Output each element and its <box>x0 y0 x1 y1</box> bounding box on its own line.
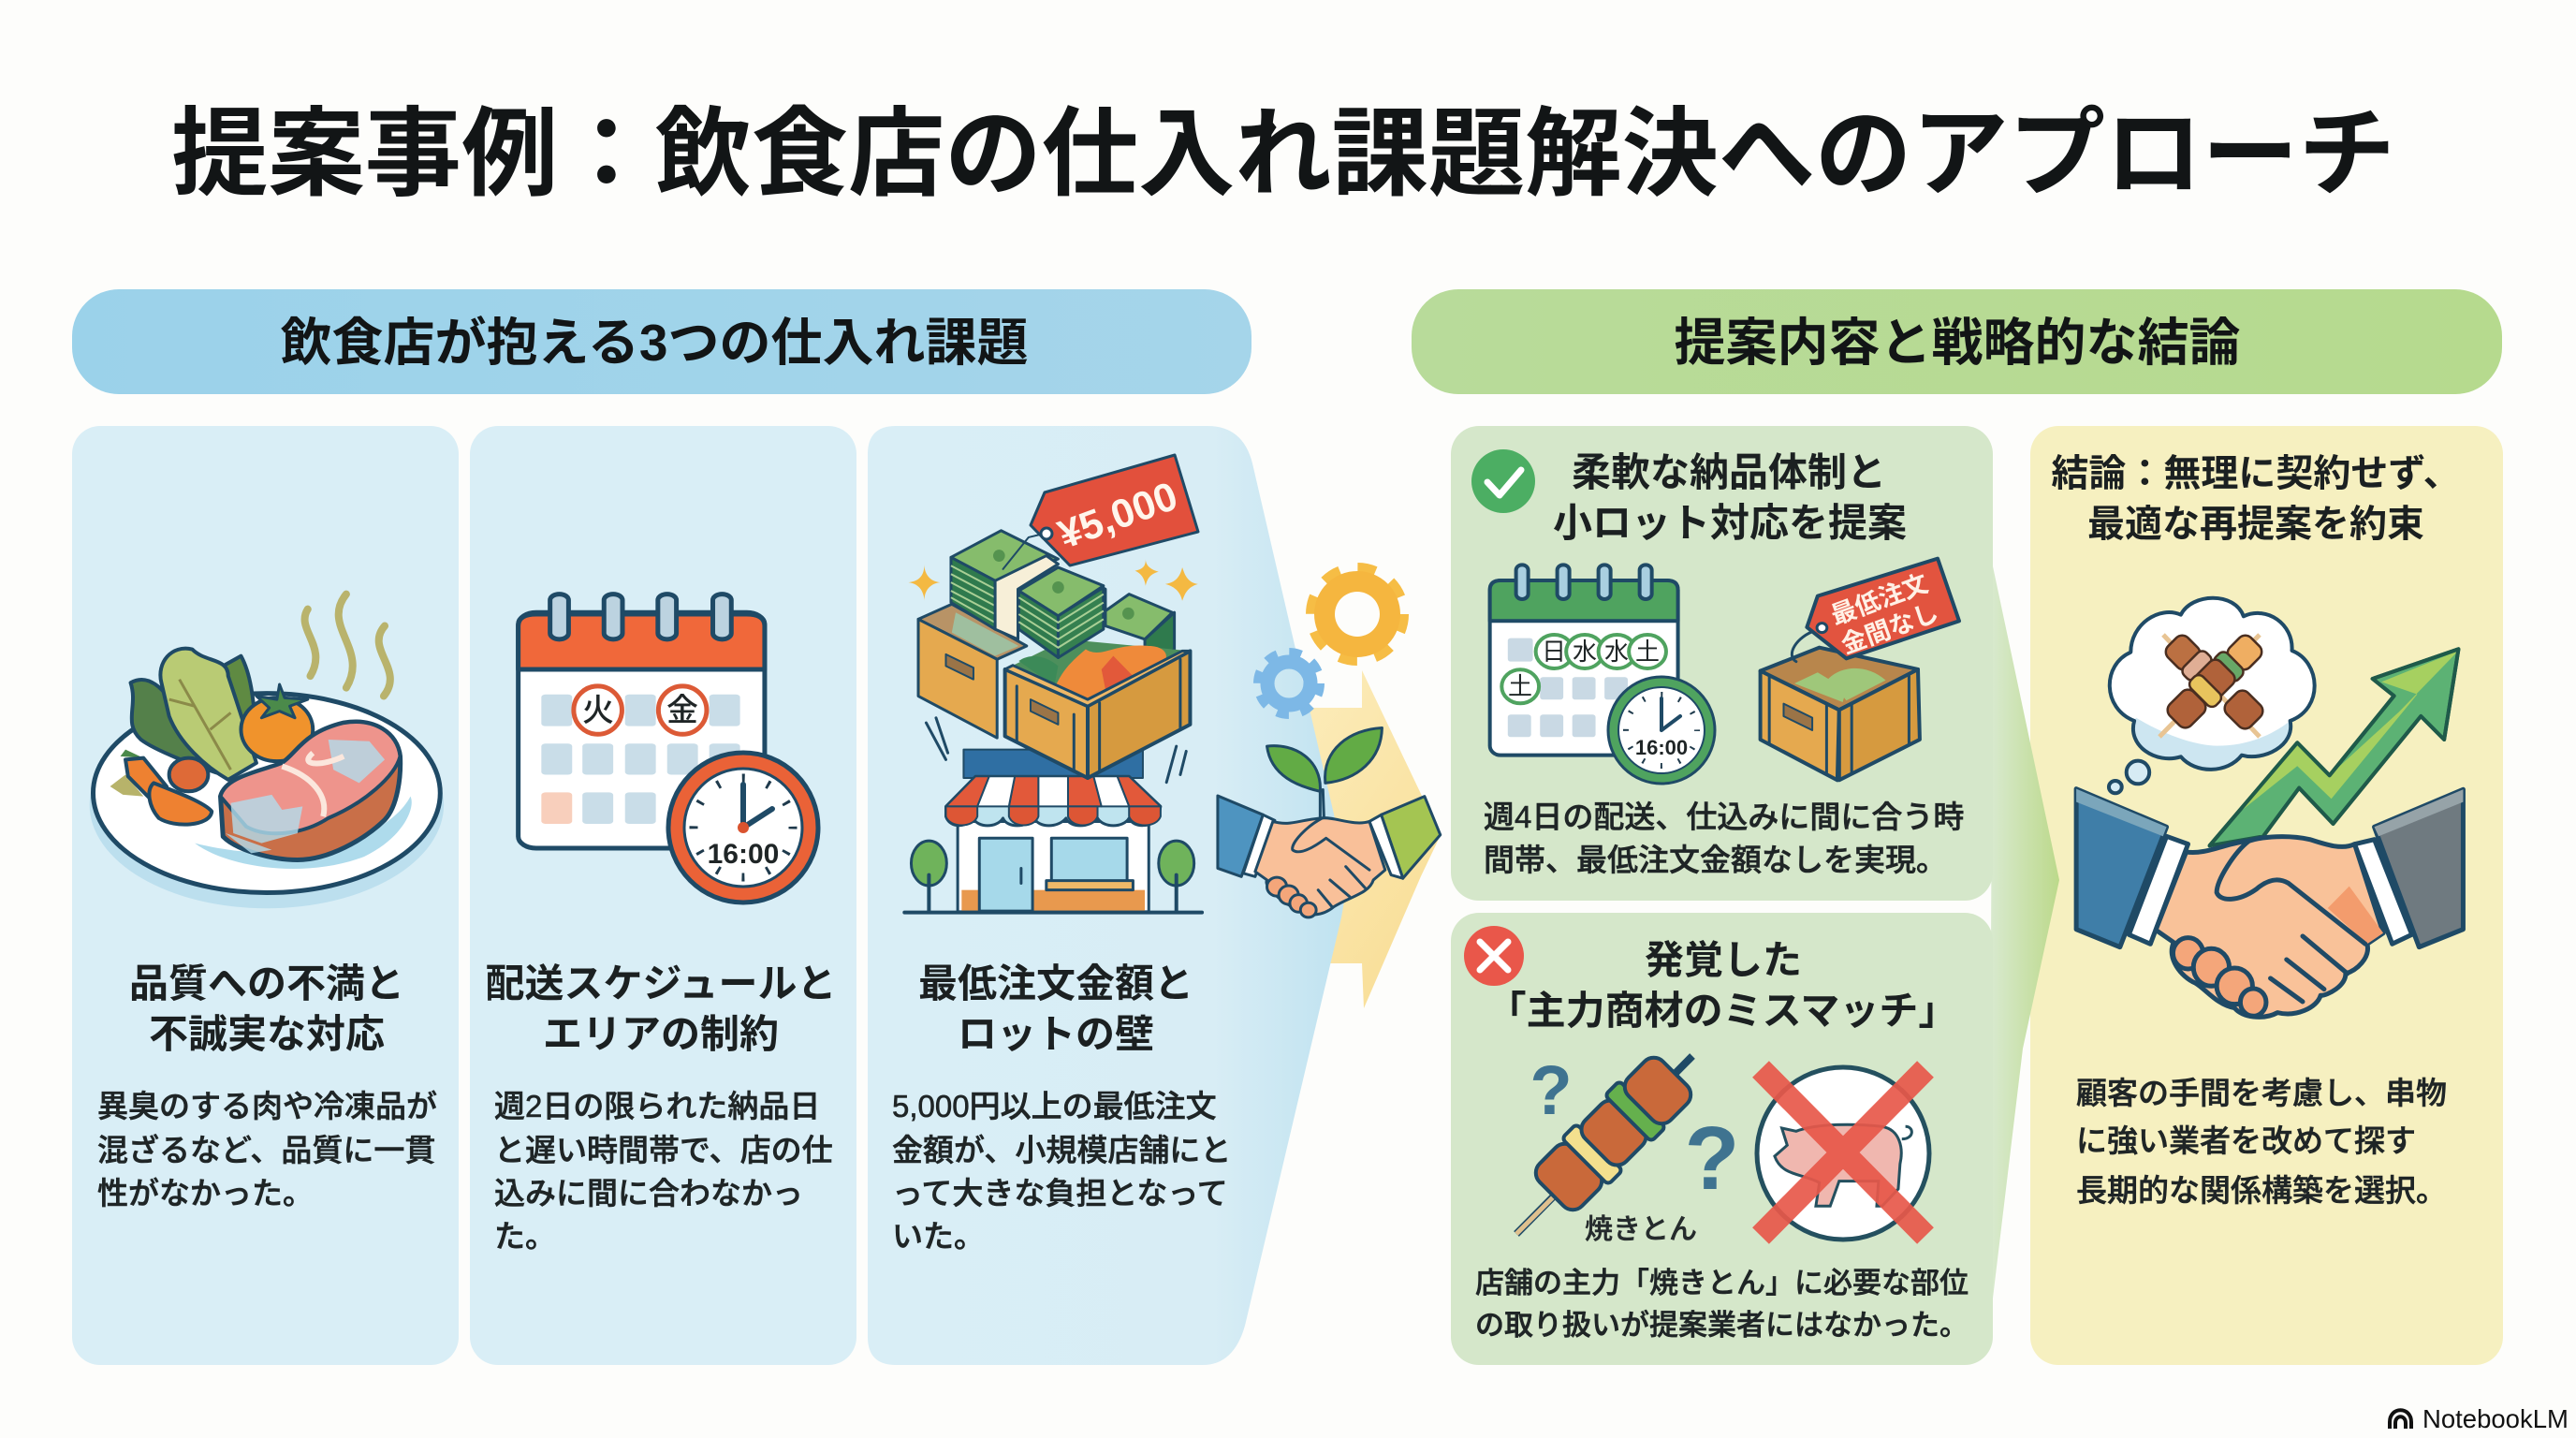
label: yakiton: 焼きとん <box>1585 1214 1697 1245</box>
icon: question marks: ? <box>1530 1051 1573 1129</box>
heading: 配送スケジュールと <box>485 961 837 1005</box>
icon: box with no minimum tag <box>1761 559 1959 780</box>
body text: 混ざるなど、品質に一貫 <box>97 1133 435 1167</box>
icon: crossed out pig <box>1757 1067 1929 1240</box>
body text: 長期的な関係構築を選択。 <box>2076 1173 2447 1208</box>
body text: 込みに間に合わなかっ <box>494 1176 803 1211</box>
body text: に強い業者を改めて探す <box>2076 1123 2416 1158</box>
section header: challenges <box>72 289 1251 394</box>
arrow: yellow transition behind challenges panel <box>1217 670 1441 1008</box>
panel: minimum order arrow panel <box>868 426 1348 1365</box>
heading: 結論：無理に契約せず、 <box>2051 453 2461 494</box>
icon: green calendar and clock: 16:00 <box>1635 736 1688 759</box>
icon: calendar and clock: 金 <box>666 693 698 728</box>
icon: green calendar and clock: 土 <box>1635 638 1660 666</box>
icon: gears <box>1259 570 1401 713</box>
icon: cross mark <box>1464 926 1524 986</box>
body text: た。 <box>494 1219 556 1254</box>
panel: conclusion <box>2030 426 2503 1365</box>
title: 提案事例：飲食店の仕入れ課題解決へのアプローチ <box>171 99 2395 208</box>
heading: ロットの壁 <box>958 1012 1154 1056</box>
body text: いた。 <box>892 1219 985 1254</box>
panel: proposal <box>1451 426 1993 901</box>
heading <box>1553 450 1907 545</box>
heading <box>1487 938 1957 1033</box>
heading: 「主力商材のミスマッチ」 <box>1487 989 1957 1033</box>
body text: 週2日の限られた納品日 <box>494 1089 820 1123</box>
heading: 柔軟な納品体制と <box>1572 450 1886 494</box>
icon: box with no minimum tag: 最低注文 <box>1827 569 1932 630</box>
heading: 最低注文金額と <box>918 961 1193 1005</box>
icon: green calendar and clock: 土 <box>1508 672 1532 700</box>
body text <box>494 1089 833 1254</box>
icon: rising arrow <box>2209 649 2458 845</box>
icon: thought cloud with crossed skewers <box>2109 598 2315 793</box>
icon: box with no minimum tag: 金間なし <box>1837 598 1942 659</box>
icon: plate of food <box>90 594 444 908</box>
heading <box>918 961 1193 1056</box>
body text: 間帯、最低注文金額なしを実現。 <box>1484 843 1947 877</box>
heading <box>129 961 404 1056</box>
icon: calendar and clock <box>519 594 818 902</box>
icon: price tag: ¥5,000 <box>1052 474 1183 558</box>
heading: 小ロット対応を提案 <box>1553 501 1907 545</box>
logo: NotebookLM: NotebookLM <box>2422 1404 2569 1433</box>
icon: big handshake <box>2076 789 2463 1017</box>
heading <box>485 961 837 1056</box>
heading: 品質への不満と <box>129 961 404 1005</box>
body text <box>1484 800 1964 877</box>
body text <box>1475 1267 1969 1342</box>
icon: price tag <box>1031 455 1198 565</box>
heading: 最適な再提案を約束 <box>2087 504 2424 545</box>
icon: check mark <box>1471 449 1535 513</box>
icon: yakiton skewer <box>1516 1052 1696 1234</box>
body text: 性がなかった。 <box>97 1176 314 1211</box>
body text: 週4日の配送、仕込みに間に合う時 <box>1484 800 1964 834</box>
arrow: green transition into conclusion <box>1989 566 2059 1329</box>
icon: calendar and clock: 火 <box>582 693 614 728</box>
body text <box>97 1089 437 1211</box>
body text: 店舗の主力「焼きとん」に必要な部位 <box>1475 1267 1969 1299</box>
body text: 顧客の手間を考慮し、串物 <box>2076 1076 2447 1110</box>
icon: question marks: ? <box>1685 1108 1739 1209</box>
icon: calendar and clock: 16:00 <box>708 839 779 870</box>
heading <box>2051 453 2461 545</box>
body text: 異臭のする肉や冷凍品が <box>97 1089 437 1123</box>
heading: エリアの制約 <box>543 1012 779 1056</box>
section header: proposal and conclusion <box>1412 289 2502 394</box>
icon: green calendar and clock: 水 <box>1573 638 1597 666</box>
icon: green calendar and clock <box>1490 565 1715 784</box>
body text <box>892 1089 1231 1254</box>
panel: mismatch <box>1451 913 1993 1365</box>
body text: 5,000円以上の最低注文 <box>892 1089 1217 1123</box>
panel: quality problem <box>72 426 459 1365</box>
heading: 発覚した <box>1645 938 1802 982</box>
icon: boxes, cash and store <box>904 531 1202 913</box>
icon: green calendar and clock: 日 <box>1542 638 1566 666</box>
body text: って大きな負担となって <box>892 1176 1228 1211</box>
section header: challenges: 飲食店が抱える3つの仕入れ課題 <box>281 314 1028 372</box>
body text: と遅い時間帯で、店の仕 <box>494 1133 833 1167</box>
heading: 不誠実な対応 <box>149 1012 385 1056</box>
body text <box>2076 1076 2447 1208</box>
body text: 金額が、小規模店舗にと <box>892 1133 1231 1167</box>
body text: の取り扱いが提案業者にはなかった。 <box>1475 1309 1969 1342</box>
section header: proposal and conclusion: 提案内容と戦略的な結論 <box>1674 314 2241 372</box>
icon: green calendar and clock: 水 <box>1604 638 1629 666</box>
panel: delivery schedule <box>470 426 856 1365</box>
icon: question marks <box>1530 1051 1739 1209</box>
icon: handshake with sprout <box>1218 727 1441 917</box>
